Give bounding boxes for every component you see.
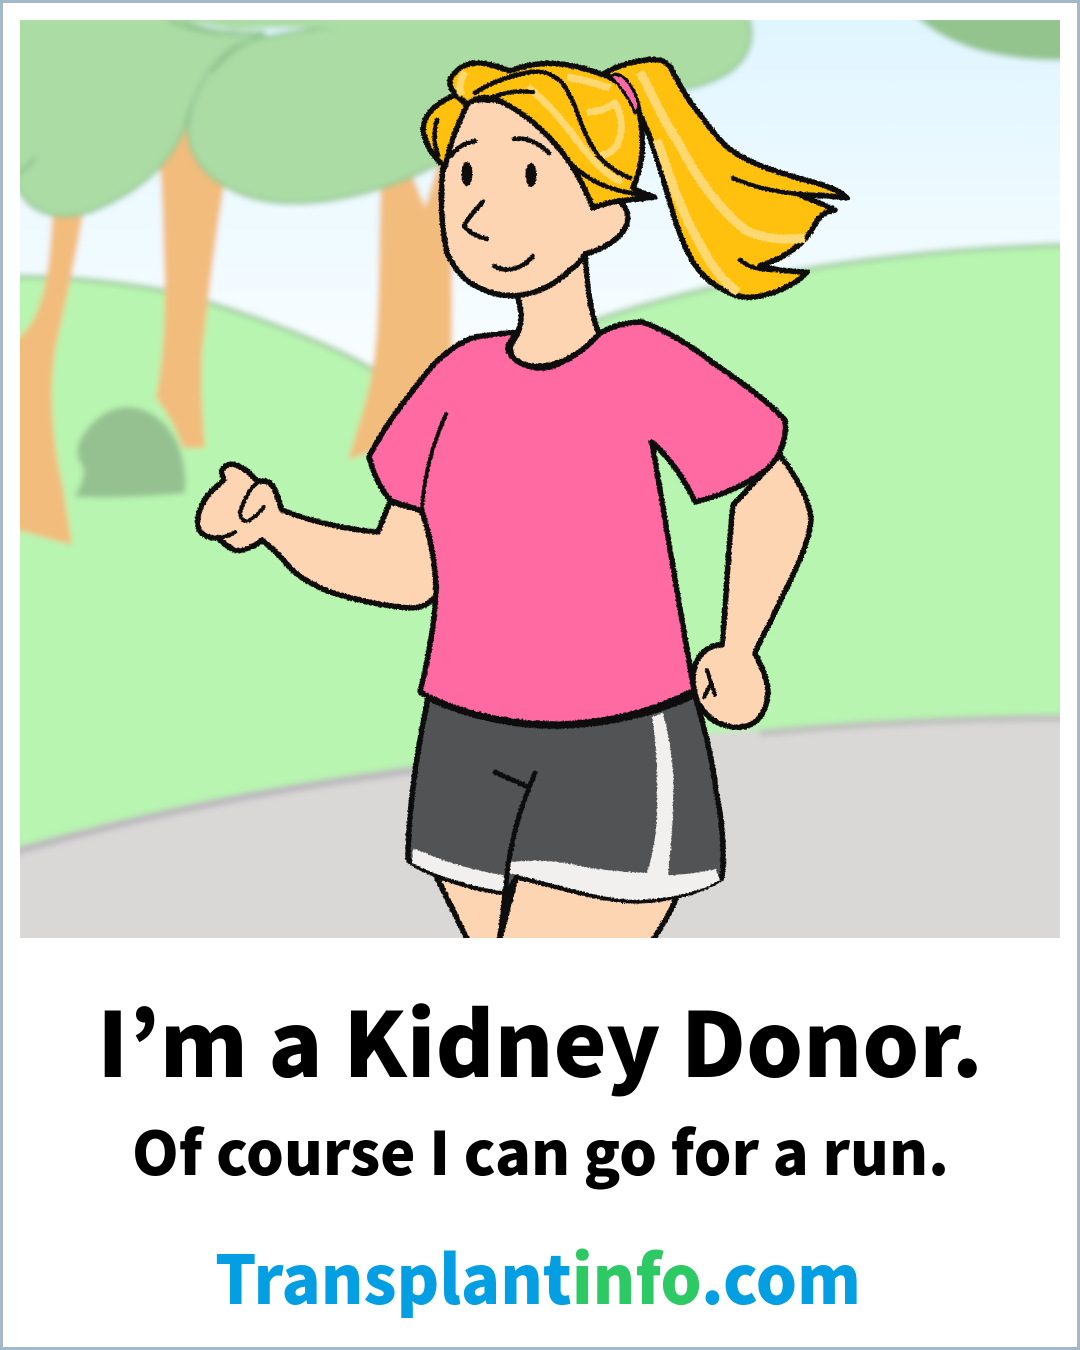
website link: Transplantinfo.com (215, 1227, 861, 1324)
bush (75, 407, 185, 497)
hair highlights (460, 72, 622, 182)
park background (10, 5, 1070, 950)
hair (450, 63, 655, 208)
headline: I’m a Kidney Donor. (97, 974, 983, 1103)
ponytail (605, 60, 847, 297)
hair side lock (423, 95, 467, 167)
hair lines (434, 72, 655, 197)
legs (434, 877, 508, 938)
runner figure (198, 60, 847, 945)
right hill (595, 240, 1060, 524)
subheading: Of course I can go for a run. (132, 1106, 949, 1193)
hair tie (610, 75, 639, 113)
shirt (369, 322, 785, 724)
shorts (408, 695, 723, 901)
left arm and fist (198, 464, 440, 608)
shorts white trim (412, 713, 720, 900)
neck (511, 250, 600, 366)
shorts lines (495, 772, 535, 937)
face (451, 139, 549, 270)
left hill (20, 271, 388, 524)
illustration panel (10, 5, 1070, 950)
tree canopies (10, 10, 265, 216)
right arm and fist (693, 455, 811, 727)
tree trunks (20, 212, 86, 547)
head and ear (441, 100, 628, 296)
path (10, 718, 1070, 950)
